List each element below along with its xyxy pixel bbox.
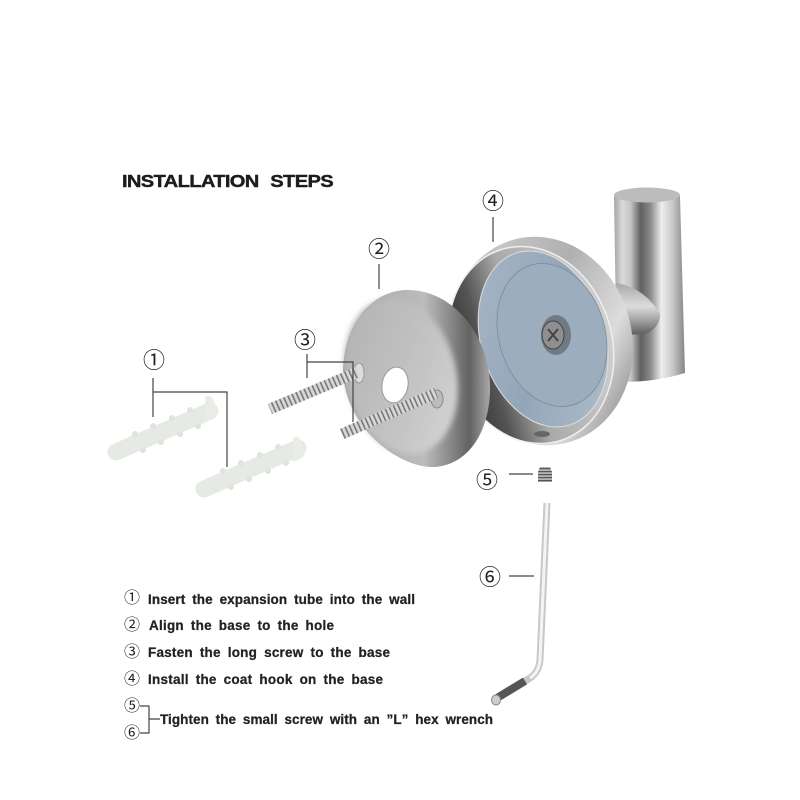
callout: number 1 [143,343,227,467]
title: INSTALLATION STEPS [122,172,334,192]
dish outer rim [427,217,655,465]
mounting plate (part 2) [329,286,490,467]
step 5 and 6 with bracket: ⑤ [124,692,140,716]
callout: number 4 [482,184,504,242]
callout: number 1: ① [143,343,165,375]
step 5 and 6 with bracket: ⑥ [124,719,140,743]
callout: number 2: ② [368,232,390,264]
callout: number 5: ⑤ [476,463,498,495]
step 3: ③ [124,638,140,662]
callout: number 6: ⑥ [479,560,501,592]
step 4: ④ [124,665,140,689]
callout: number 3: ③ [294,323,316,355]
coat hook with base (part 4) [424,188,685,465]
step 1: ① [124,584,140,608]
hook stem [616,283,660,335]
set-screw hole [534,431,550,437]
step 2 [124,611,334,635]
step 4 [124,665,383,689]
expansion tubes (part 1) [116,396,305,489]
callout: number 2 [368,232,390,289]
callout: number 4: ④ [482,184,504,216]
dish back plate [457,235,629,443]
screw slots [354,363,364,383]
centre hole [379,365,411,405]
long screws (part 3) [270,372,436,434]
callout: number 5 [476,463,533,495]
step 5 and 6 with bracket: Tighten the small screw with an ”L” hex wrench [160,712,493,727]
hook cylinder [614,196,685,382]
callout: number 6 [479,560,534,592]
step 1: Insert the expansion tube into the wall [148,592,415,607]
callout: number 3 [294,323,353,422]
dish inner wall [424,226,638,464]
step 3: Fasten the long screw to the base [148,645,390,660]
step 1 [124,584,415,608]
instruction list [124,584,493,743]
step 5 and 6 with bracket [124,692,493,743]
L hex wrench (part 6) [492,503,547,705]
step 4: Install the coat hook on the base [148,672,383,687]
step 3 [124,638,390,662]
small set screw (part 5) [538,467,552,482]
step 2: ② [124,611,140,635]
step 2: Align the base to the hole [149,618,334,633]
centre screw [541,315,571,355]
